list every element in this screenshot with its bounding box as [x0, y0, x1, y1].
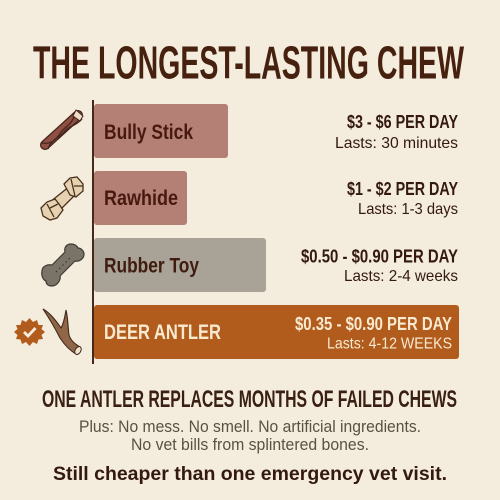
duration: deer antler: Lasts: 4-12 WEEKS: [327, 336, 452, 352]
bar: rawhide: [94, 171, 187, 225]
duration: rubber toy: Lasts: 2-4 weeks: [344, 268, 458, 285]
icon: check badge: [14, 318, 45, 346]
cost: rawhide: $1 - $2 PER DAY: [347, 179, 458, 199]
duration: rawhide: Lasts: 1-3 days: [358, 201, 458, 218]
duration: bully stick: Lasts: 30 minutes: [335, 135, 458, 152]
benefits text: No vet bills from splintered bones.: [131, 436, 369, 454]
row: rawhide: [41, 171, 458, 225]
row: deer antler: [14, 305, 459, 359]
cost: deer antler: $0.35 - $0.90 PER DAY: [295, 314, 452, 334]
bar label: deer antler: DEER ANTLER: [104, 321, 221, 344]
benefits text: Plus: No mess. No smell. No artificial ingredients.: [79, 418, 421, 436]
icon: bully stick: [42, 110, 83, 149]
cost: bully stick: $3 - $6 PER DAY: [347, 112, 458, 132]
bar label: rawhide: Rawhide: [104, 187, 178, 210]
icon: deer antler: [43, 309, 83, 356]
row: rubber toy: [42, 238, 458, 292]
bar: bully stick: [94, 104, 228, 158]
icon: rubber toy: [42, 244, 84, 286]
bar: deer antler: [94, 305, 459, 359]
icon: rawhide: [41, 177, 83, 220]
benefits text: [79, 418, 421, 454]
bar: rubber toy: [94, 238, 266, 292]
cost: rubber toy: $0.50 - $0.90 PER DAY: [301, 246, 458, 266]
bar label: bully stick: Bully Stick: [104, 121, 193, 144]
bar label: rubber toy: Rubber Toy: [104, 254, 199, 278]
axis line: [92, 100, 94, 364]
closing statement: Still cheaper than one emergency vet visit.: [53, 464, 447, 485]
row: bully stick: [42, 104, 458, 158]
